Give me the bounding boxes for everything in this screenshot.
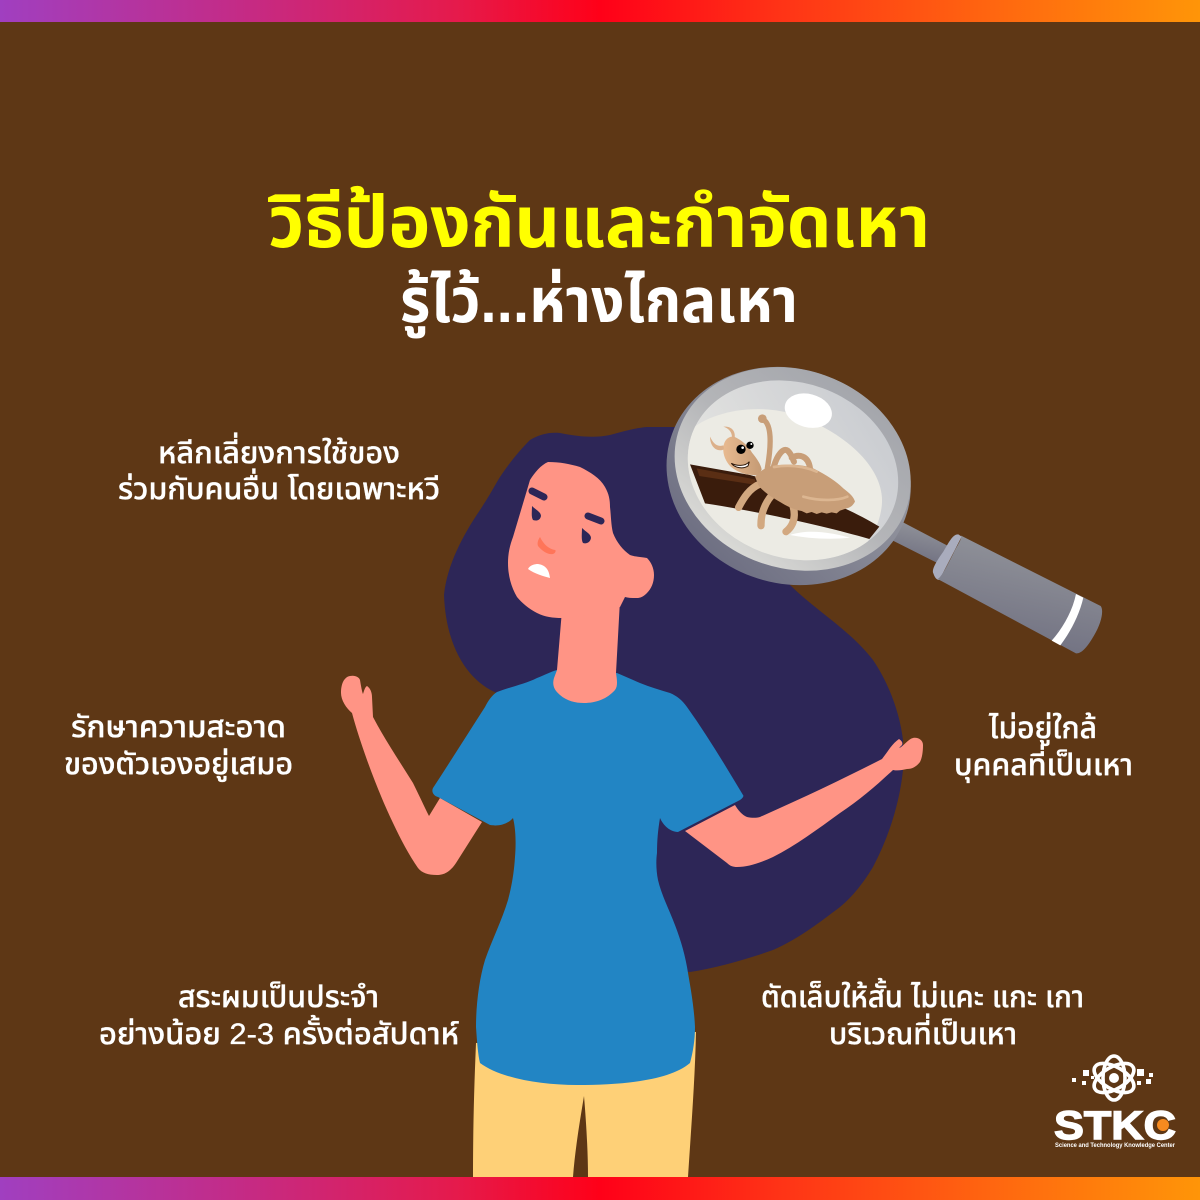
mouth (528, 564, 550, 578)
louse front legs (739, 484, 794, 532)
tip: keep clean (64, 711, 293, 782)
tip: keep away from people with lice: บุคคลที่เป็นเหา (954, 744, 1133, 783)
title: รู้ไว้...ห่างไกลเหา (400, 267, 798, 339)
logo dot (1157, 1119, 1169, 1131)
nose (538, 537, 556, 554)
right arm (685, 738, 923, 867)
tip: cut nails (761, 978, 1084, 1051)
twig highlight (697, 468, 757, 485)
logo subtitle: Science and Technology Knowledge Center (1055, 1143, 1176, 1149)
title (268, 183, 930, 339)
lens frame outer (636, 333, 942, 619)
lens (662, 352, 924, 589)
tip: wash hair: สระผมเป็นประจำ (178, 981, 379, 1014)
tip: avoid sharing items: ร่วมกับคนอื่น โดยเฉพาะหวี (118, 468, 440, 506)
louse eyes (736, 445, 746, 454)
grip stripe (1052, 594, 1083, 645)
title: วิธีป้องกันและกำจัดเหา (268, 183, 930, 263)
eyes (532, 506, 591, 543)
louse antennae (710, 427, 735, 450)
bottom gradient bar (0, 1177, 1200, 1200)
tip: wash hair (99, 981, 459, 1051)
tip: wash hair: อย่างน้อย 2-3 ครั้งต่อสัปดาห์ (99, 1015, 459, 1051)
neck (553, 600, 620, 703)
louse body highlight (774, 466, 847, 500)
handle grip (938, 536, 1102, 653)
louse back legs (774, 450, 810, 468)
louse mouth (731, 462, 749, 468)
top gradient bar (0, 0, 1200, 22)
tip: cut nails: ตัดเล็บให้สั้น ไม่แคะ แกะ เกา (761, 978, 1084, 1014)
tip: keep away from people with lice (954, 712, 1133, 783)
illustration: woman with magnifier (341, 427, 923, 1177)
logo pixels (1072, 1069, 1153, 1085)
tip: cut nails: บริเวณที่เป็นเหา (829, 1013, 1017, 1051)
twig (690, 464, 879, 539)
face (508, 462, 654, 618)
tip: keep clean: ของตัวเองอยู่เสมอ (64, 748, 293, 782)
tip: avoid sharing items: หลีกเลี่ยงการใช้ของ (158, 432, 400, 470)
head (508, 462, 654, 618)
hair (444, 427, 903, 972)
eyebrows (532, 491, 601, 521)
crescent under twig (790, 532, 850, 539)
lens inner light (680, 409, 882, 567)
tip: keep away from people with lice: ไม่อยู่ใกล้ (988, 712, 1097, 746)
louse head (723, 437, 762, 475)
handle collar (933, 534, 962, 580)
louse body (755, 465, 855, 514)
louse (710, 414, 855, 532)
left arm (341, 676, 482, 875)
logo atom icon (1089, 1056, 1139, 1100)
louse upper leg (763, 419, 770, 468)
logo wordmark: STKC (1054, 1104, 1176, 1148)
trousers (473, 1032, 696, 1177)
glare (781, 388, 836, 433)
magnifying glass with louse (666, 366, 1102, 654)
tip: keep clean: รักษาความสะอาด (71, 711, 286, 744)
tip: avoid sharing items (118, 432, 440, 506)
lens frame (646, 335, 940, 603)
blue t-shirt (432, 670, 743, 1085)
logo: STKC (1054, 1056, 1176, 1149)
handle neck (892, 522, 949, 564)
